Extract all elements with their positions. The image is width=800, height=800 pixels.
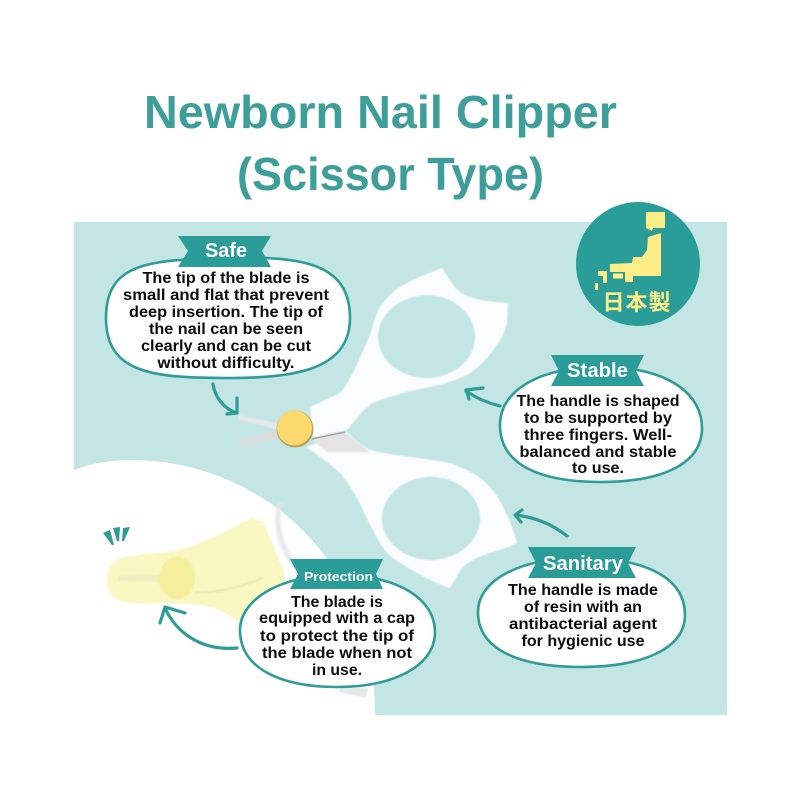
callout: safe: deep insertion. The tip of <box>129 304 324 321</box>
arrow: sanitary <box>515 510 567 536</box>
white circle panel: cap close-up background <box>74 460 375 715</box>
capped scissors illustration <box>107 503 368 698</box>
title: Newborn Nail Clipper <box>144 86 617 138</box>
blades <box>238 415 278 430</box>
callout: protection: equipped with a cap <box>259 610 415 627</box>
scissors illustration <box>238 268 517 588</box>
callout: safe: the nail can be seen <box>149 321 303 338</box>
callout: stable: to use. <box>572 460 624 477</box>
callout: protection: the blade when not <box>262 645 413 662</box>
badge: made in Japan <box>576 202 700 326</box>
arrow: protection <box>160 607 237 648</box>
callout: safe: small and flat that prevent <box>123 287 330 304</box>
ribbon: stable <box>551 355 644 386</box>
title <box>144 86 617 200</box>
upper handle <box>310 268 508 437</box>
callout: stable: The handle is shaped <box>516 393 680 410</box>
callout: safe: clearly and can be cut <box>141 338 312 355</box>
lower handle <box>306 432 517 588</box>
ribbon: safe <box>178 236 271 267</box>
callout: safe: without difficulty. <box>156 355 294 372</box>
callout: safe <box>106 236 350 378</box>
pin <box>276 410 314 448</box>
callout: stable <box>500 355 702 482</box>
callout: stable: to be supported by <box>524 410 672 427</box>
ribbon: protection <box>290 559 383 589</box>
arrow: safe <box>213 384 237 414</box>
callout: protection <box>240 559 435 687</box>
callout: sanitary <box>478 547 685 667</box>
callout: protection: in use. <box>312 662 362 679</box>
callout: sanitary: antibacterial agent <box>509 616 658 633</box>
callout: protection: The blade is <box>291 594 383 611</box>
arrow: stable <box>466 388 500 406</box>
callout: stable: balanced and stable <box>520 444 677 461</box>
ribbon: sanitary <box>528 547 636 578</box>
background panel <box>74 222 727 715</box>
callout: sanitary: of resin with an <box>524 599 642 616</box>
badge: made in Japan: 日本製 <box>602 285 670 317</box>
ribbon: safe: Safe <box>205 240 247 262</box>
icon: map of Japan <box>595 212 665 290</box>
callout: safe: The tip of the blade is <box>142 270 310 287</box>
icon: yellow blade cap <box>107 518 284 640</box>
callout: sanitary: for hygienic use <box>522 633 645 650</box>
callout: stable: three fingers. Well- <box>524 427 672 444</box>
callout: sanitary: The handle is made <box>508 582 658 599</box>
ribbon: stable: Stable <box>567 360 628 382</box>
ribbon: protection: Protection <box>304 569 373 584</box>
title: (Scissor Type) <box>237 148 544 200</box>
ribbon: sanitary: Sanitary <box>543 553 624 575</box>
callout: protection: to protect the tip of <box>260 628 415 645</box>
icon: motion ticks <box>103 527 130 545</box>
